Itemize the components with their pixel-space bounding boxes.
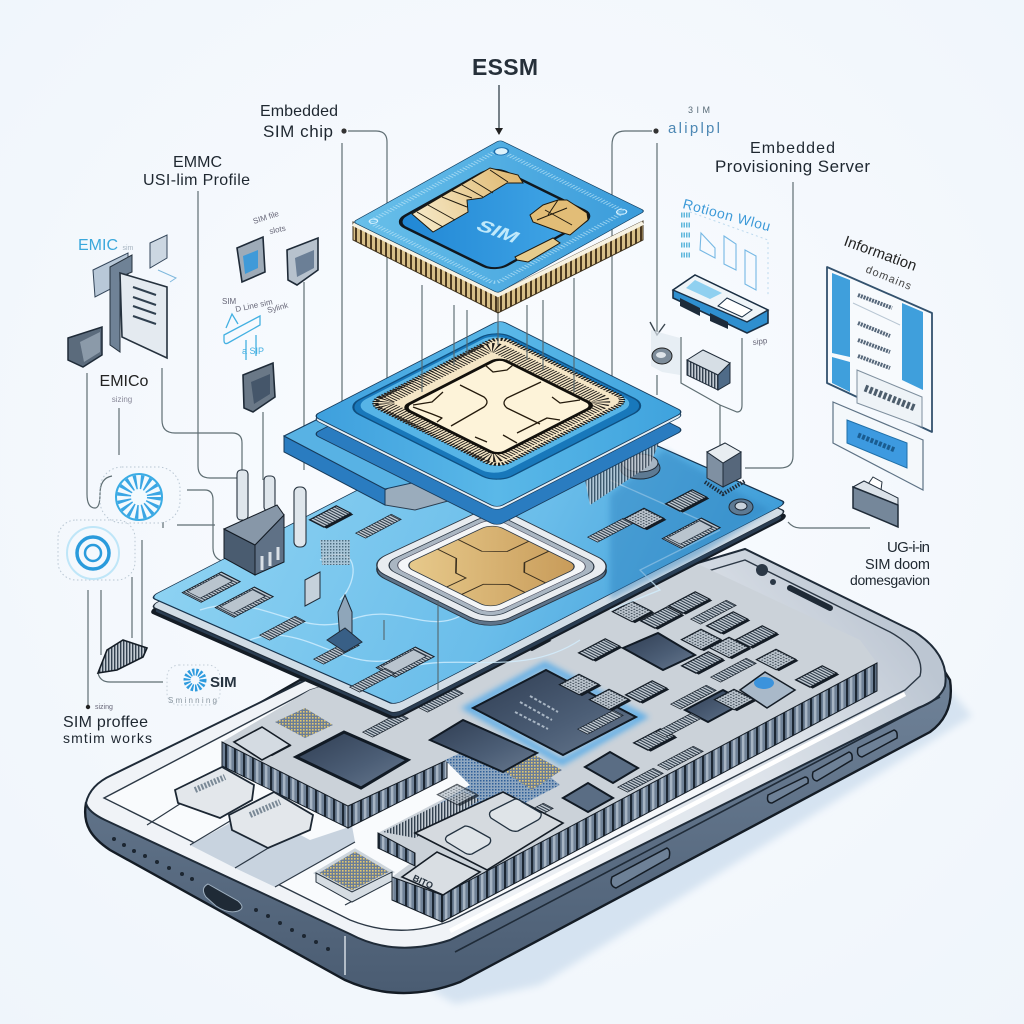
tiny block cluster: [305, 572, 320, 606]
label: lower right caption: [850, 539, 930, 588]
ribbed right side: [498, 221, 643, 313]
label: lower right caption: SIM doom: [865, 557, 930, 573]
grey panels: [190, 815, 355, 887]
module marks: [195, 777, 280, 815]
holder white ring: [390, 517, 593, 615]
label: small chip captions: Sylink: [266, 300, 290, 315]
board base edge: [150, 409, 787, 719]
plate body thickness: [313, 338, 684, 526]
layer 2 lower plate: [284, 403, 660, 510]
darker right region: [610, 450, 770, 600]
third dark chip: [296, 732, 408, 788]
label: emmc profile: [143, 154, 250, 189]
line emmc doc: [162, 368, 242, 478]
panel title: Information: [842, 233, 919, 275]
icon: chip one: [237, 237, 265, 282]
line upper chip: [303, 282, 305, 470]
panel outline: [690, 212, 768, 295]
line chip to pillar: [262, 412, 264, 480]
panel body: [827, 267, 932, 432]
ribbed long wall: [442, 663, 877, 922]
icon and label: SIM badge: Sminning: [168, 696, 217, 705]
main processor chip: [473, 670, 636, 755]
line embedded sim right: [348, 131, 387, 400]
card outline: [833, 402, 923, 490]
gold pad patch two: [505, 755, 562, 790]
label: small chip captions: SIM file: [252, 209, 281, 226]
label: sim profiles: smtim works: [63, 730, 152, 746]
front module plate: [415, 792, 563, 870]
side groove line: [455, 697, 940, 952]
phone logic board: [222, 565, 877, 922]
antenna mark: [843, 640, 851, 662]
layer 2: main SIM chip plate: [313, 320, 684, 526]
icon: striped chip: [98, 640, 147, 673]
cube top face: [707, 443, 741, 463]
ribbed left side: [353, 222, 498, 313]
contact lines: [413, 365, 580, 443]
ribbed wall left: [222, 742, 348, 828]
ribbed wall middle: [348, 760, 447, 828]
gold sensor: [316, 850, 392, 892]
plate white rim: [313, 323, 684, 511]
plate grey underside: [385, 470, 470, 510]
blue button: [847, 420, 907, 468]
layer 3: blue circuit board: [150, 395, 787, 719]
label: emmc small: [100, 373, 149, 404]
line circle two: [163, 522, 215, 528]
panel: information domains: [827, 233, 932, 432]
label: emmc profile: USI-lim Profile: [143, 172, 250, 189]
inner ring: [345, 329, 649, 484]
connector front: [224, 529, 255, 575]
label: embedded sim chip: [260, 103, 338, 141]
front small chip: [402, 852, 480, 895]
tower connector on board: [224, 470, 306, 575]
icon: small connector: [853, 477, 898, 527]
small front label: BITO: [411, 873, 435, 891]
label: sim display: 3IM: [688, 105, 710, 115]
label: sim display: aliplpl: [668, 120, 720, 137]
bottom corner seam: [344, 936, 346, 975]
device ports: [680, 298, 728, 329]
title: ESSM: [472, 54, 538, 80]
corner marks: [491, 146, 511, 157]
chip label: SIM: [472, 217, 524, 246]
device top: [673, 275, 768, 322]
line emico down: [118, 408, 120, 455]
chip stack face: [80, 332, 100, 362]
row divider: [853, 303, 900, 325]
contact pad: [402, 358, 595, 455]
plate side: [284, 436, 385, 505]
line circle connector: [187, 490, 226, 562]
pillars: [237, 470, 306, 547]
right blue column: [902, 303, 923, 390]
plate right rib block: [585, 440, 660, 505]
small tower component: [327, 595, 362, 652]
holder shadow base: [365, 509, 618, 631]
board silver rim: [150, 404, 787, 714]
document page: [120, 273, 167, 358]
small silver chips on logic board: [249, 592, 839, 842]
board traces: [200, 480, 720, 670]
icon and label: SIM badge: [167, 665, 237, 705]
gold contact stripes: [412, 168, 523, 232]
board top: [222, 565, 877, 895]
connector tab: [864, 477, 882, 498]
gold pad patch: [275, 708, 333, 738]
line right sim: [612, 131, 652, 395]
contact lines: [403, 523, 580, 609]
dot left long: [86, 705, 90, 709]
icon: small box: [687, 350, 730, 390]
phone side wall: [85, 640, 951, 993]
connector lines behind layers: [87, 131, 870, 706]
module slots: [446, 799, 541, 854]
label: emmc small: sizing: [112, 395, 132, 404]
line usim profile: [198, 191, 238, 478]
side ticks: [681, 215, 690, 255]
gold right block: [530, 200, 588, 235]
blue logo chip: [740, 672, 795, 708]
icon: usb server device: [673, 275, 768, 333]
label: lower right caption: domesgavion: [850, 572, 930, 588]
label: sim profiles: SIM proffee: [63, 714, 148, 731]
icon: circle module: [100, 467, 180, 523]
cube component on board: [705, 443, 745, 494]
left blue column: [832, 273, 850, 357]
device top blue: [686, 280, 722, 299]
cube left face: [707, 452, 723, 487]
document lines: [133, 287, 156, 324]
panel: action card: [833, 402, 923, 490]
device tag: [718, 298, 752, 317]
sensor base: [316, 872, 392, 902]
label: embedded provisioning server: Provisioning Server: [715, 157, 870, 176]
line provisioning: [745, 182, 793, 468]
connector face: [853, 487, 898, 527]
oval capacitor: [620, 454, 660, 479]
right dark chip: [685, 690, 745, 722]
line right arrow: [656, 143, 658, 395]
holder outer ring: [365, 505, 618, 627]
label: embedded sim chip: Embedded: [260, 103, 338, 120]
ribbed wall front corner: [392, 877, 442, 922]
small dark chip one: [585, 752, 638, 783]
line board right: [788, 522, 870, 528]
label: embedded provisioning server: Embedded: [750, 140, 835, 157]
panel subtitle: domains: [864, 264, 913, 293]
board top surface: [150, 395, 787, 705]
second dark chip: [430, 720, 537, 772]
card left: [93, 253, 128, 297]
smartphone body: [85, 549, 951, 993]
phone screen surface: [104, 560, 921, 930]
list rows: [858, 295, 892, 368]
chip rim: [353, 223, 643, 295]
lower box: [857, 370, 922, 427]
label: small chip captions: D Line sim: [235, 297, 274, 314]
label: lower right caption: UG-i-in: [887, 539, 930, 556]
top speaker and camera: [756, 564, 830, 608]
fringe base: [367, 335, 630, 469]
section lines: [147, 800, 392, 905]
label: sim display: [668, 105, 720, 137]
stripe dividers: [417, 170, 508, 227]
layer 1: top eSIM chip: [353, 140, 645, 313]
silver module one: [175, 767, 254, 818]
gold contact pad: [403, 523, 580, 609]
dot embedded: [341, 128, 347, 134]
icon: tag pin: [651, 330, 680, 375]
phone drop shadow: [430, 690, 972, 1004]
icon: blue tray sketch: [224, 314, 264, 360]
upper right dark chip: [623, 633, 695, 670]
silver module two: [229, 792, 313, 848]
vertical links between layers: [384, 278, 574, 690]
left chip block: [234, 727, 290, 760]
small chip stack: [68, 327, 102, 367]
lines lower left: [98, 540, 163, 682]
lower-left screen panels: [147, 800, 392, 905]
charging port: [203, 884, 242, 912]
line embedded sim left: [341, 143, 343, 440]
button text: [858, 435, 895, 450]
label: small chip captions: SIM: [222, 297, 237, 306]
solder dots: [320, 540, 350, 565]
phone top bezel: [86, 549, 946, 948]
processor text marks: [515, 696, 558, 729]
icon: chip three: [243, 363, 275, 412]
label: embedded sim chip: SIM chip: [263, 122, 333, 141]
panel title: Rotioon Wlou: [681, 195, 772, 234]
cube pins: [705, 481, 745, 494]
fringe outer dots: [369, 336, 629, 468]
chip stipple band: [369, 150, 625, 284]
round capacitor: [729, 499, 753, 515]
plate top surface: [313, 320, 684, 508]
holder middle ring: [380, 512, 603, 620]
icon: profile document group: [68, 235, 176, 367]
small blue arrow: [158, 270, 176, 282]
ribbed wall step: [378, 833, 415, 866]
logo swirl: [754, 677, 774, 689]
inner well: [394, 166, 595, 272]
hatched strip: [383, 792, 480, 838]
icon: ring module: [58, 520, 135, 580]
small dark chip two: [563, 783, 613, 812]
line left long upper: [87, 373, 112, 508]
lower-left modules: [175, 767, 392, 902]
gold lower strip: [515, 238, 560, 262]
speaker holes: [112, 837, 330, 951]
spine: [110, 255, 132, 352]
label: embedded provisioning server: [715, 140, 870, 176]
side buttons: [611, 730, 897, 888]
inner ring light: [353, 333, 637, 477]
connector top: [224, 505, 284, 545]
icon: chip two: [287, 238, 318, 285]
connector slots: [262, 547, 278, 570]
label: emmc small: EMICo: [100, 373, 149, 390]
flow boxes: [700, 233, 756, 290]
label: small caption: sipp: [752, 336, 768, 347]
arrow head right: [650, 322, 665, 335]
label: small chip captions: slots: [269, 224, 287, 236]
plate top: [284, 403, 470, 489]
cube right face: [723, 452, 741, 487]
flow sketch panel: [681, 195, 772, 295]
line usb bracket: [681, 337, 742, 445]
corner flat panel: [802, 638, 850, 663]
lower box text: [865, 388, 915, 408]
SIM holder on board: [365, 505, 618, 631]
line left long lower: [87, 590, 89, 706]
lower blue column: [832, 357, 850, 392]
blue trace field: [420, 735, 560, 835]
icon: blue tray sketch: a SIP: [242, 346, 264, 356]
icon and label: SIM badge: SIM: [210, 674, 237, 691]
board chips: [182, 490, 720, 692]
bezel highlight: [450, 694, 905, 931]
label: emmc profile: EMMC: [173, 154, 222, 171]
dot right sim: [653, 128, 659, 134]
blue glow traces: [468, 665, 642, 762]
label: sim profiles: sizing: [95, 704, 113, 711]
arrow: title to chip: [495, 85, 503, 135]
back ribbed strip: [683, 575, 790, 640]
chip top surface: [353, 140, 645, 293]
connector side: [255, 515, 284, 575]
label: sim profiles: [63, 704, 152, 746]
right block grid: [537, 200, 572, 225]
device body: [673, 275, 768, 333]
label: emic blue: EMIC sim: [78, 237, 134, 254]
fringe wires: [380, 345, 605, 460]
label: small chip captions: [222, 209, 290, 315]
card back: [150, 235, 167, 268]
connector top: [853, 481, 898, 505]
